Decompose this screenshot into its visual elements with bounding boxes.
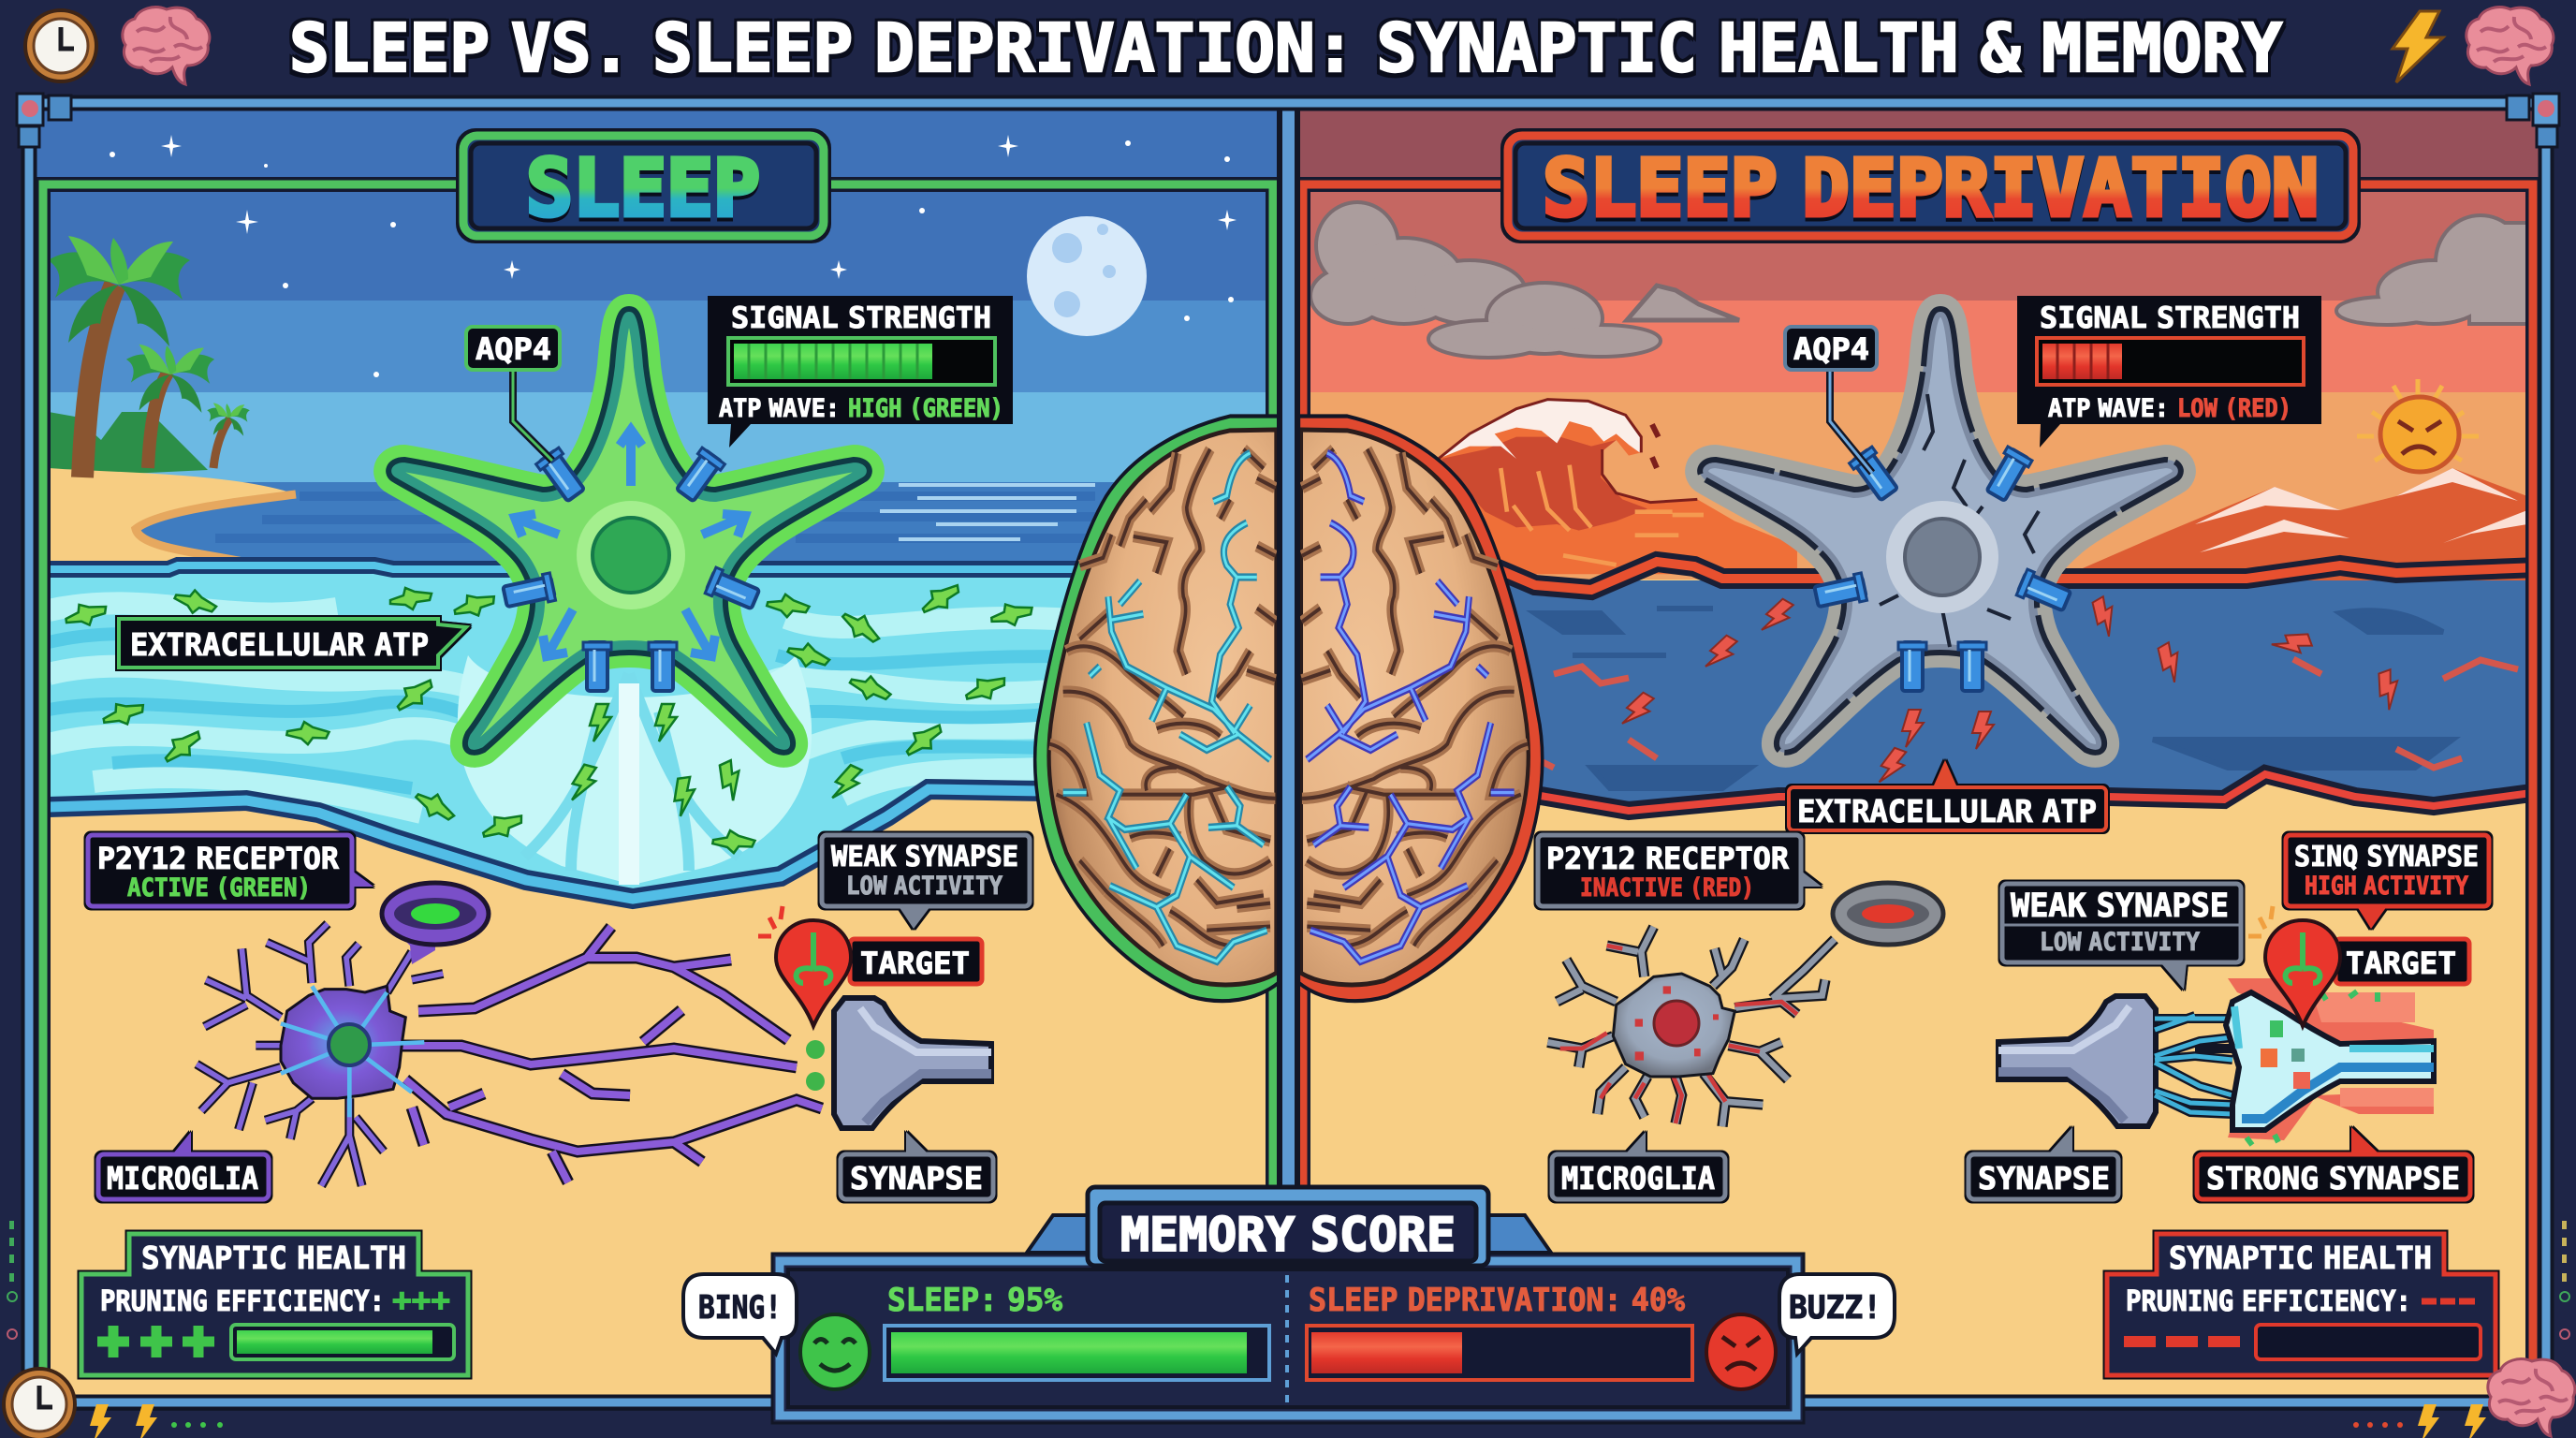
heading: sleep [459,131,828,241]
nucleus [329,1024,370,1065]
label: synapse sleep [841,1132,993,1199]
deprivation score: SLEEP DEPRIVATION: 40% [1309,1282,1685,1319]
label: P2Y12 deprivation: P2Y12 RECEPTOR [1546,841,1790,876]
icon: bottom bolts right [2418,1404,2486,1438]
label: AQP4 sleep: AQP4 [476,331,551,367]
label: synapse sleep: SYNAPSE [850,1160,983,1196]
icon: bottom clock [4,1369,75,1438]
sleep panel frame [43,184,1273,1403]
label: AQP4 deprivation [1785,327,1877,473]
side dots left [7,1221,17,1339]
moon [1027,216,1147,336]
stars [110,135,1237,377]
icon: brain left [123,7,210,84]
label: SINQ synapse: HIGH ACTIVITY [2305,872,2469,901]
signal strength: deprivation: LOW (RED) [2177,394,2291,423]
panel: sleep deprivation scene [1297,108,2542,1400]
icon: clock [25,10,96,81]
label: weak synapse sleep: LOW ACTIVITY [846,872,1003,901]
synaptic health: deprivation [2107,1234,2496,1375]
label: synapse deprivation: SYNAPSE [1978,1160,2110,1196]
label: extracellular ATP deprivation [1789,760,2106,830]
label: strong synapse: STRONG SYNAPSE [2206,1160,2460,1196]
label: extracellular ATP deprivation: EXTRACELLULAR ATP [1797,793,2097,829]
microglia: deprivation [1547,883,1943,1126]
island and palm trees [48,236,296,562]
label: microglia deprivation [1552,1132,1725,1199]
weak synapse: deprivation [1998,996,2156,1126]
label: weak synapse deprivation [2002,884,2241,990]
target: sleep: TARGET [860,946,970,981]
side dots right [2560,1221,2569,1339]
centre divider [1277,108,1300,1404]
memory score panel [772,1187,1804,1423]
happy face [800,1314,870,1389]
angry sun [2357,379,2479,472]
nucleus [1886,501,1998,613]
label: SINQ synapse [2286,835,2489,929]
label: weak synapse sleep [822,835,1030,929]
clouds [1312,204,2527,356]
panel: sleep scene [35,108,1280,1400]
bottom dots right [2353,1422,2403,1428]
deprivation score [1307,1282,1692,1380]
icon: bottom brain [2488,1359,2575,1436]
water channels [1813,447,2072,691]
signal strength: deprivation [2017,296,2321,448]
label: P2Y12 sleep: ACTIVE (GREEN) [127,873,311,902]
astrocyte: sleep [388,309,870,753]
signal strength: sleep: SIGNAL STRENGTH [731,301,991,335]
bubble: BING [683,1274,797,1354]
synaptic health: sleep: +++ [392,1282,450,1319]
heading: sleep deprivation: SLEEP DEPRIVATION [1543,142,2319,234]
tidal wave [1439,400,1797,574]
label: SINQ synapse: SINQ SYNAPSE [2294,841,2479,873]
weak synapse terminal [834,998,991,1128]
wings [1027,1215,1551,1253]
nucleus [1654,1001,1699,1046]
receptor [1833,883,1943,945]
synaptic health: sleep [81,1234,468,1375]
target: deprivation [2248,906,2469,1026]
stormy sea [1300,562,2539,811]
label: microglia sleep: MICROGLIA [107,1160,258,1196]
label: weak synapse deprivation: LOW ACTIVITY [2040,928,2201,957]
corner ornaments [17,94,2559,147]
bubble: BING: BING! [698,1289,782,1327]
flow arrows [515,430,745,656]
heading: sleep: SLEEP [526,142,760,234]
target: sleep [758,906,982,1026]
cracks [1880,394,2039,647]
label: P2Y12 sleep [88,835,373,906]
memory score title: MEMORY SCORE [1120,1208,1456,1262]
title: SLEEP VS. SLEEP DEPRIVATION: SYNAPTIC HEALTH & MEMORY [289,9,2282,87]
deprivation panel frame [1303,184,2533,1403]
label: P2Y12 sleep: P2Y12 RECEPTOR [97,841,340,876]
label: P2Y12 deprivation: INACTIVE (RED) [1580,873,1754,902]
signal strength: sleep: HIGH (GREEN) [848,394,1003,423]
synaptic health: sleep: SYNAPTIC HEALTH [141,1240,406,1276]
label: P2Y12 deprivation [1538,835,1822,906]
label: extracellular ATP sleep: EXTRACELLULAR ATP [130,626,429,663]
synaptic health: sleep: PRUNING EFFICIENCY: [100,1285,385,1318]
label: extracellular ATP sleep [119,619,466,668]
receptor [382,883,489,964]
bottom dots left [171,1422,223,1428]
icon: lightning [2393,11,2443,82]
label: AQP4 deprivation: AQP4 [1793,331,1869,367]
label: strong synapse [2197,1127,2470,1199]
brain: right hemisphere [1298,417,1543,1001]
bubble: BUZZ [1779,1274,1895,1354]
signal strength: deprivation: ATP WAVE: [2048,394,2169,423]
ATP particles [65,580,1033,857]
signal strength: sleep [708,296,1013,448]
synaptic contacts [806,1040,825,1091]
signal strength: sleep: ATP WAVE: [719,394,840,423]
label: weak synapse deprivation: WEAK SYNAPSE [2011,888,2229,925]
water: extracellular fluid [49,565,1151,899]
damaged ATP particles [1618,595,2406,788]
sleep score [885,1282,1269,1380]
label: microglia sleep [98,1132,269,1199]
nucleus [577,501,685,609]
signal strength: deprivation: SIGNAL STRENGTH [2040,301,2300,335]
water channels [502,448,761,691]
brain: left hemisphere [1035,417,1279,1001]
angry face [1706,1314,1776,1389]
label: synapse deprivation [1969,1127,2118,1199]
target: deprivation: TARGET [2346,946,2456,981]
mountains [2076,468,2527,580]
icon: bottom bolts left [90,1404,157,1438]
astrocyte: sleep deprivation [1700,309,2181,753]
sleep score: SLEEP: 95% [887,1282,1062,1319]
label: AQP4 sleep [466,327,560,461]
icon: brain right [2466,7,2554,84]
bubble: BUZZ: BUZZ! [1789,1289,1881,1327]
strong synapse [2155,978,2434,1145]
synaptic health: deprivation: PRUNING EFFICIENCY: [2126,1285,2411,1318]
synaptic health: deprivation: SYNAPTIC HEALTH [2169,1240,2432,1276]
label: weak synapse sleep: WEAK SYNAPSE [831,841,1018,873]
microglia: sleep [197,883,825,1186]
label: microglia deprivation: MICROGLIA [1561,1160,1715,1196]
